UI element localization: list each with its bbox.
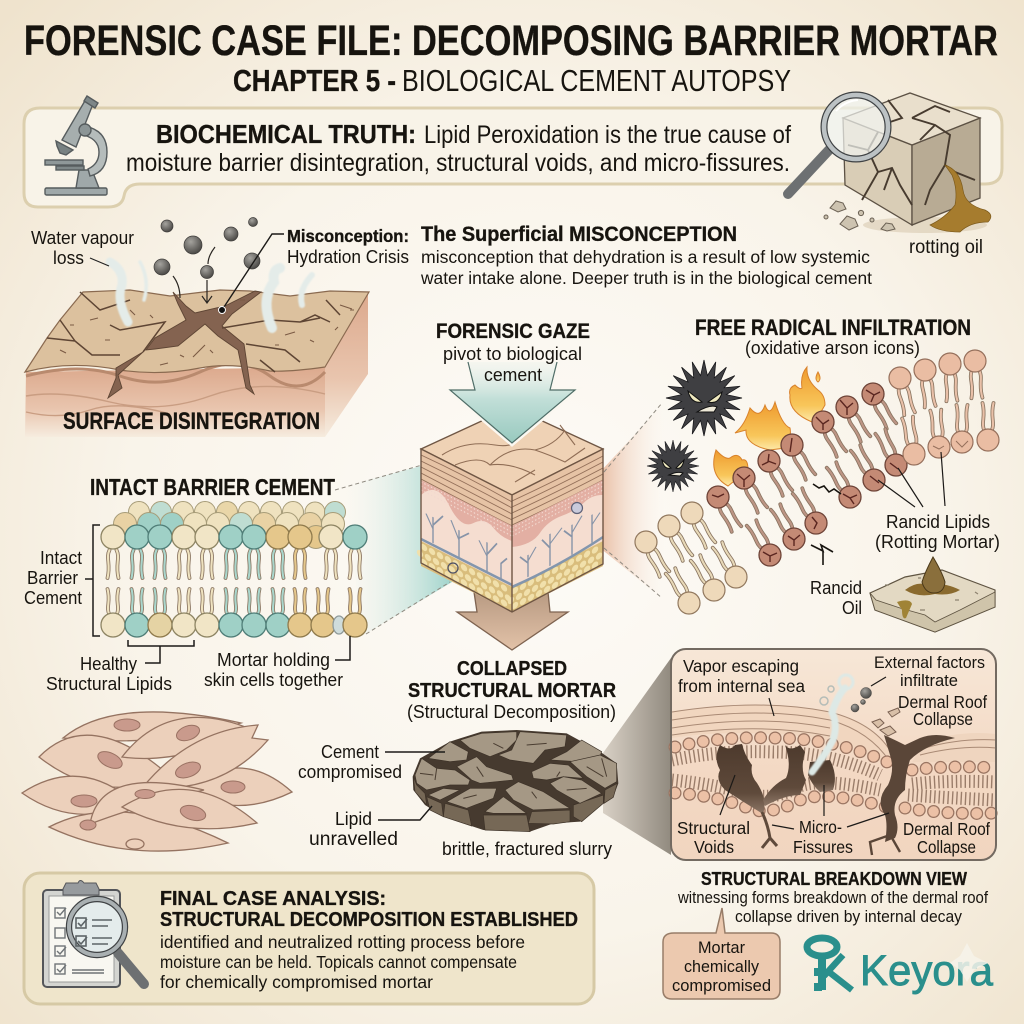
text block: the superficial misconception [420, 223, 872, 288]
text block: structural breakdown view: witnessing forms breakdown of the dermal roof [677, 889, 988, 907]
label: cement compromised [298, 742, 445, 782]
illustration: skin cross-section cube [420, 407, 603, 613]
banner text: moisture barrier disintegration, structural voids, and micro-fissures. [126, 149, 790, 177]
callout: mortar chemically compromised: Mortar [698, 938, 745, 957]
label: water vapour loss [31, 228, 134, 268]
chart: rancid lipid bilayer [635, 350, 999, 614]
panel labels: Vapor escaping [683, 656, 799, 676]
heading: forensic gaze: pivot to biological [443, 344, 582, 364]
lipid head rows [675, 738, 996, 813]
rubble [824, 201, 895, 231]
icon: rancid oil on stone [870, 557, 995, 632]
icon: flames [714, 367, 825, 486]
external factor particles [851, 688, 872, 712]
label: rancid lipids rotting mortar: Rancid Lipids [886, 512, 990, 532]
arrow: teal down [450, 362, 575, 443]
wedge: pink zoom projection [600, 403, 664, 600]
heading: forensic gaze [436, 320, 590, 385]
heading: free radical infiltration: FREE RADICAL INFILTRATION [695, 315, 971, 340]
label: rancid lipids rotting mortar [875, 452, 1000, 552]
heading: collapsed structural mortar: COLLAPSED [457, 658, 567, 680]
label: rancid oil [810, 578, 862, 618]
label: intact barrier cement bracket: Cement [24, 588, 82, 608]
pink lipids [889, 350, 999, 465]
heading: collapsed structural mortar [407, 658, 617, 722]
heading: collapsed structural mortar: STRUCTURAL MORTAR [408, 680, 617, 702]
heading: collapsed structural mortar: (Structural Decomposition) [407, 702, 616, 722]
panel labels: Voids [694, 837, 734, 857]
label: rancid oil: Rancid [810, 578, 862, 598]
subtitle: BIOLOGICAL CEMENT AUTOPSY [402, 63, 791, 98]
back rows of lipid heads [114, 502, 346, 548]
heading: free radical infiltration: (oxidative arson icons) [745, 338, 920, 358]
sparkle overlay [950, 943, 988, 982]
panel labels: Dermal Roof [903, 819, 990, 839]
rancid rust lipids [707, 383, 907, 566]
callout: mortar chemically compromised: chemically [684, 957, 759, 976]
cube left face [420, 448, 512, 612]
callout: mortar chemically compromised [663, 908, 780, 999]
panel labels [677, 653, 990, 857]
panel: final case analysis [24, 873, 594, 1004]
label: intact barrier cement bracket [24, 525, 100, 636]
rotting oil label: rotting oil [909, 237, 983, 258]
panel labels: from internal sea [678, 676, 805, 696]
icon: key [807, 938, 852, 990]
panel labels: External factors [874, 653, 985, 672]
label: misconception hydration crisis: Hydration Crisis [287, 247, 409, 267]
label: intact barrier cement bracket: Intact [40, 548, 82, 568]
healthy beige lipids [635, 502, 747, 614]
chart: intact lipid bilayer [101, 502, 367, 637]
icon: microscope [45, 96, 107, 195]
analysis text: for chemically compromised mortar [160, 972, 433, 992]
label: mortar holding skin cells together: Mortar holding [217, 650, 330, 670]
label: brittle fractured slurry: brittle, fractured slurry [442, 839, 612, 859]
panel labels: Fissures [793, 837, 853, 857]
disc side faces [413, 777, 617, 832]
label: rancid lipids rotting mortar: (Rotting Mortar) [875, 532, 1000, 552]
stratum corneum layers [672, 705, 996, 765]
label: healthy structural lipids [46, 640, 194, 694]
banner text [126, 119, 791, 177]
panel labels: Collapse [917, 837, 976, 857]
icon: magnifying glass [788, 95, 888, 194]
icon: clipboard [43, 880, 120, 987]
analysis text [160, 888, 578, 992]
lipid tails [672, 752, 996, 800]
illustration: spindle skin cells [22, 712, 292, 851]
structural voids [716, 744, 835, 814]
text block: structural breakdown view: STRUCTURAL BREAKDOWN VIEW [701, 868, 967, 889]
label: intact barrier cement bracket: Barrier [27, 568, 78, 588]
panel labels: infiltrate [900, 671, 958, 690]
label: cement compromised: compromised [298, 762, 402, 782]
heading: free radical infiltration [695, 315, 971, 358]
cube cracks [848, 100, 975, 205]
upper leaflet tails [108, 550, 360, 578]
analysis text: identified and neutralized rotting process before [160, 932, 525, 952]
wedge: teal zoom projection [345, 465, 452, 636]
label: water vapour loss: Water vapour [31, 228, 134, 248]
label: cement compromised: Cement [321, 742, 379, 762]
text block: the superficial misconception: misconception that dehydration is a result of low systemic [421, 247, 870, 267]
label: healthy structural lipids: Healthy [80, 654, 137, 674]
upper leaflet heads [101, 525, 367, 549]
heading: forensic gaze: FORENSIC GAZE [436, 320, 590, 343]
text block: structural breakdown view [677, 868, 988, 926]
subtitle [233, 63, 791, 98]
label: lipid unravelled [309, 806, 432, 850]
label: healthy structural lipids: Structural Lipids [46, 674, 172, 694]
label: water vapour loss: loss [53, 248, 84, 268]
icon: large free radical [666, 360, 742, 436]
callout: mortar chemically compromised: compromised [672, 976, 771, 995]
logo: Keyora [807, 938, 993, 995]
label: lipid unravelled: Lipid [335, 809, 372, 829]
lower leaflet heads [101, 613, 367, 637]
cracks [108, 291, 261, 398]
label: mortar holding skin cells together [204, 636, 350, 690]
panel labels: Collapse [913, 709, 973, 729]
analysis text: FINAL CASE ANALYSIS: [160, 888, 386, 910]
analysis text: STRUCTURAL DECOMPOSITION ESTABLISHED [160, 909, 578, 931]
wedge: gray zoom projection [603, 658, 671, 855]
vapour wisps [110, 262, 312, 328]
label: misconception hydration crisis: Misconception: [287, 226, 409, 246]
icon: cracked mortar cube with rotting oil [824, 93, 991, 258]
panel labels: Dermal Roof [898, 692, 987, 712]
falling particles [154, 218, 260, 278]
illustration: fractured mortar disc [413, 730, 618, 832]
disc top plates [415, 732, 617, 813]
logo: Keyora: Keyora [860, 947, 993, 995]
cube right face [511, 449, 603, 613]
panel labels: Structural [677, 818, 750, 838]
analysis text: moisture can be held. Topicals cannot compensate [160, 952, 517, 972]
illustration: surface disintegration skin block [25, 218, 369, 437]
panel: structural breakdown cross-section [671, 649, 996, 860]
icon: small free radical [647, 440, 699, 492]
surface label: SURFACE DISINTEGRATION [63, 408, 320, 435]
panel: biochemical truth banner [24, 96, 1002, 207]
label: mortar holding skin cells together: skin cells together [204, 670, 343, 690]
text block: structural breakdown view: collapse driven by internal decay [735, 908, 963, 926]
banner text: BIOCHEMICAL TRUTH: [156, 119, 416, 149]
icon: magnifying glass [69, 899, 144, 984]
label: misconception hydration crisis [218, 226, 409, 314]
arrow: brown down [457, 592, 568, 650]
dermal roof collapse crack [881, 735, 955, 842]
lower leaflet tails [108, 589, 360, 615]
label: lipid unravelled: unravelled [309, 828, 398, 850]
label: rancid oil: Oil [842, 598, 862, 618]
panel labels: Micro- [799, 817, 842, 837]
banner text: Lipid Peroxidation is the true cause of [424, 121, 791, 149]
text block: the superficial misconception: water intake alone. Deeper truth is in the biological cement [420, 268, 872, 288]
text block: the superficial misconception: The Superficial MISCONCEPTION [421, 223, 737, 246]
vapor plume [812, 675, 853, 772]
subtitle: CHAPTER 5 - [233, 63, 396, 98]
heading: intact barrier cement: INTACT BARRIER CEMENT [90, 474, 335, 500]
heading: forensic gaze: cement [484, 365, 542, 385]
cube top face [421, 407, 603, 495]
